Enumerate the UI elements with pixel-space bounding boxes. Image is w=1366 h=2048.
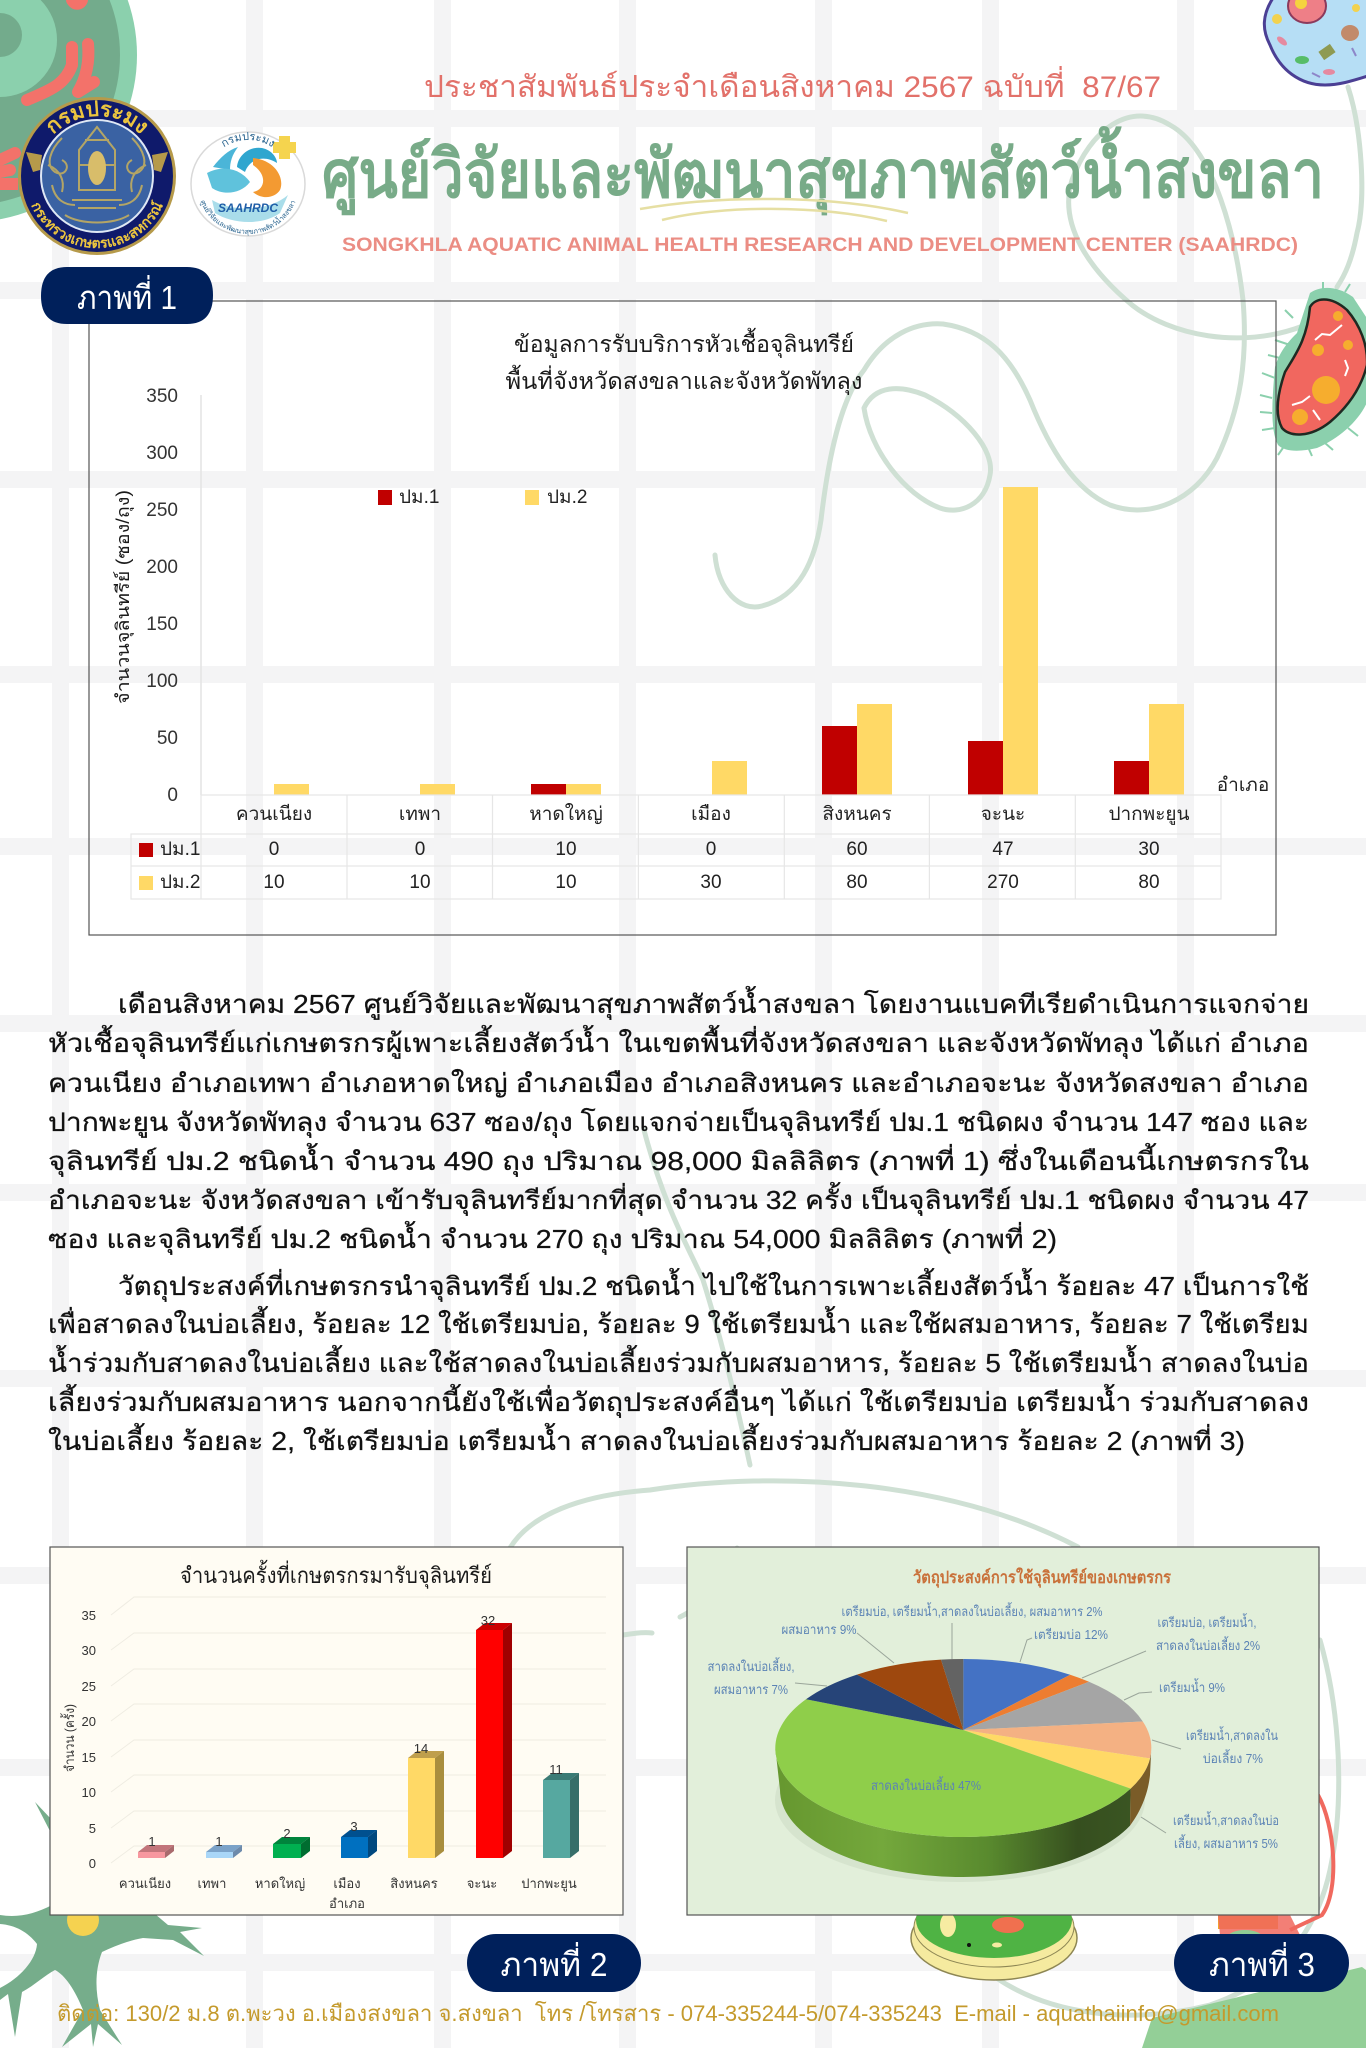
chart 3 labels: บ่อเลี้ยง 7% [1203,1749,1263,1766]
chart 1 y axis: 350 [146,386,178,407]
footer: contact line: ติดต่อ: 130/2 ม.8 ต.พะวง อ.เมืองสงขลา จ.สงขลา โทร /โทรสาร - 074-335244-5/074-335243 E-mail - aquathaiinfo@gmail.com [57,2001,1279,2026]
decoration: bottom-right green leaf [1142,1967,1366,2048]
chart 2 x labels: ควนเนียง [119,1876,171,1891]
chart 3 labels: เลี้ยง, ผสมอาหาร 5% [1174,1834,1278,1851]
chart 3 leader lines [795,1623,1181,1833]
chart 1 y axis: 200 [146,557,178,578]
chart 1 legend: ปม.2 [547,487,587,508]
chart 1 data table: เทพา [399,804,441,825]
chart 2 y axis: 25 [82,1679,96,1694]
chart 2 title: จำนวนครั้งที่เกษตรกรมารับจุลินทรีย์ [180,1560,492,1589]
chart 2 x labels: ปากพะยูน [521,1876,577,1892]
chart 2 bar: จะนะ [476,1613,512,1858]
chart 3 labels: สาดลงในบ่อเลี้ยง 47% [871,1776,981,1793]
chart 1 data table: 47 [992,839,1014,860]
chart 2 bar: เมือง [341,1819,377,1858]
text block: paragraph 1: ปากพะยูน จังหวัดพัทลุง จำนวน 637 ซอง/ถุง โดยแจกจ่ายเป็นจุลินทรีย์ ปม.1 ชนิดผง จำนวน 147 ซอง และ [48,1107,1309,1138]
chart 3 labels: เตรียมบ่อ 12% [1034,1627,1108,1642]
chart 2 x labels: เมือง [333,1876,361,1891]
chart 2 x labels: หาดใหญ่ [255,1876,305,1891]
chart 2 y axis: 35 [82,1608,96,1623]
text block: paragraph 1: จุลินทรีย์ ปม.2 ชนิดน้ำ จำนวน 490 ถุง ปริมาณ 98,000 มิลลิลิตร (ภาพที่ 1) ซึ่งในเดือนนี้เกษตรกรใน [48,1143,1309,1177]
chart 1 title: ข้อมูลการรับบริการหัวเชื้อจุลินทรีย์ [514,328,854,358]
chart 1 x axis title: อำเภอ [1217,775,1269,796]
chart 1 data table: 80 [1138,872,1160,893]
chart 1 data table: 30 [1138,839,1160,860]
text block: paragraph 1: หัวเชื้อจุลินทรีย์แก่เกษตรกรผู้เพาะเลี้ยงสัตว์น้ำ ในเขตพื้นที่จังหวัดสงขลา และจังหวัดพัทลุง ได้แก่ อำเภอ [48,1025,1309,1059]
decoration: top-right blue cell [1264,0,1366,85]
chart 3 labels [708,1602,1279,1851]
decoration: bottom-centre green cell [911,1882,1077,1980]
chart 2 y axis: 5 [89,1821,96,1836]
chart 1 data table: หาดใหญ่ [529,803,603,825]
chart 2 y axis: 10 [82,1785,96,1800]
chart 1 data table: 0 [415,839,425,860]
chart 1 data table: 30 [700,872,722,893]
logo: SAAHRDC: ศูนย์วิจัยและพัฒนาสุขภาพสัตว์น้ำสงขลา [200,200,296,236]
chart 3 labels: เตรียมน้ำ 9% [1159,1678,1225,1695]
chart 2 x labels: สิงหนคร [390,1876,438,1891]
text block: paragraph 1: ซอง และจุลินทรีย์ ปม.2 ชนิดน้ำ จำนวน 270 ถุง ปริมาณ 54,000 มิลลิลิตร (ภาพที่ 2) [48,1221,1057,1255]
chart 2 bar: สิงหนคร [408,1741,444,1858]
text block: paragraph 1 [48,986,1309,1255]
chart 1 data table: 270 [987,872,1019,893]
chart 2 y axis: จำนวน (ครั้ง) [60,1704,77,1772]
logo: Department of Fisheries seal [18,97,176,255]
chart 2 y axis: 20 [82,1714,96,1729]
chart 1 data table: ควนเนียง [236,803,312,825]
chart 2 bar: จะนะ: 32 [481,1613,495,1628]
panel: chart 3 purposes pie [687,1547,1319,1915]
badge: figure 1: ภาพที่ 1 [77,275,177,316]
chart 2 bar: หาดใหญ่ [273,1826,310,1858]
badge: figure 2: ภาพที่ 2 [500,1942,608,1983]
logo: SAAHRDC: SAAHRDC [218,201,278,215]
chart 2 bar: ปากพะยูน [543,1762,579,1858]
chart 2 y axis: 30 [82,1643,96,1658]
chart 2 bar: ปากพะยูน: 11 [549,1762,563,1777]
logo: Department of Fisheries seal: กระทรวงเกษตรและสหกรณ์ [31,199,163,248]
text block: paragraph 2 [48,1268,1309,1456]
chart 1 data table: 10 [555,839,577,860]
text block: paragraph 1: ควนเนียง อำเภอเทพา อำเภอหาดใหญ่ อำเภอเมือง อำเภอสิงหนคร และอำเภอจะนะ จังหวัดสงขลา อำเภอ [48,1069,1309,1098]
logo: Department of Fisheries seal: กรมประมง [48,100,148,134]
chart 1 data table: จะนะ [981,804,1025,825]
chart 1 y axis: 100 [146,671,178,692]
decorative title underline [640,199,908,221]
text block: paragraph 2: วัตถุประสงค์ที่เกษตรกรนำจุลินทรีย์ ปม.2 ชนิดน้ำ ไปใช้ในการเพาะเลี้ยงสัตว์น้ำ ร้อยละ 47 เป็นการใช้ [118,1268,1309,1302]
chart 1 y axis: จำนวนจุลินทรีย์ (ซอง/ถุง) [113,490,134,704]
panel: chart 2 visits by district [50,1547,623,1915]
chart 2 x labels: อำเภอ [329,1896,365,1911]
chart 1 data table: 10 [409,872,431,893]
chart 2 bar: เทพา: 1 [215,1834,223,1849]
decoration: top-left green cell [0,0,137,222]
chart 3 labels: สาดลงในบ่อเลี้ยง 2% [1156,1636,1260,1653]
heading: bulletin line: ประชาสัมพันธ์ประจำเดือนสิงหาคม 2567 ฉบับที่ 87/67 [424,66,1161,104]
badge: figure 3 [1174,1934,1349,1992]
chart 1 data table [131,795,1221,899]
chart 1 title [506,328,862,395]
chart 1 legend [378,487,587,508]
logo: SAAHRDC: กรมประมง [222,132,274,147]
chart 2 bar: หาดใหญ่: 2 [283,1826,291,1841]
chart 2 bar: เทพา [206,1834,242,1858]
chart 2 y axis: 15 [82,1750,96,1765]
decoration: bottom-left green neuron [0,1802,204,2047]
text block: paragraph 2: ในบ่อเลี้ยง ร้อยละ 2, ใช้เตรียมบ่อ เตรียมน้ำ สาดลงในบ่อเลี้ยงร่วมกับผสมอาหาร ร้อยละ 2 (ภาพที่ 3) [48,1423,1245,1456]
chart 2 x labels: เทพา [198,1876,226,1891]
chart 3 labels: สาดลงในบ่อเลี้ยง, [708,1657,794,1674]
chart 1 y axis: 50 [157,728,178,749]
chart 1 y axis: 150 [146,614,178,635]
chart 1 data table: 0 [269,839,279,860]
badge: figure 2 [467,1934,641,1992]
chart 3 labels: เตรียมน้ำ,สาดลงใน [1186,1726,1278,1743]
chart 2 bar: เมือง: 3 [350,1819,358,1834]
text block: paragraph 2: น้ำร่วมกับสาดลงในบ่อเลี้ยง และใช้สาดลงในบ่อเลี้ยงร่วมกับผสมอาหาร, ร้อยละ 5 ใช้เตรียมน้ำ สาดลงในบ่อ [48,1345,1309,1378]
text block: paragraph 1: อำเภอจะนะ จังหวัดสงขลา เข้ารับจุลินทรีย์มากที่สุด จำนวน 32 ครั้ง เป็นจุลินทรีย์ ปม.1 ชนิดผง จำนวน 47 [48,1182,1309,1216]
chart 1 data table: 0 [706,839,716,860]
chart 1 data table: 10 [555,872,577,893]
logo: SAAHRDC [190,131,306,237]
chart 2 gridlines [111,1597,606,1863]
decoration: bottom-right coral organism [1218,1795,1333,1946]
chart 3 3D pie [775,1659,1151,1882]
chart 3 labels: ผสมอาหาร 7% [714,1682,788,1697]
chart 3 labels: เตรียมบ่อ, เตรียมน้ำ, [1158,1613,1256,1630]
chart 1 y axis: 250 [146,500,178,521]
chart 1 data table: เมือง [691,804,731,825]
chart 3 labels: ผสมอาหาร 9% [782,1622,857,1637]
chart 2 bar: ควนเนียง: 1 [148,1834,156,1849]
text block: paragraph 1: เดือนสิงหาคม 2567 ศูนย์วิจัยและพัฒนาสุขภาพสัตว์น้ำสงขลา โดยงานแบคทีเรียดำเนินการแจกจ่าย [118,986,1309,1020]
chart 1 data table: สิงหนคร [822,804,892,825]
chart 1 title: พื้นที่จังหวัดสงขลาและจังหวัดพัทลุง [506,365,862,395]
badge: figure 1 [41,267,213,324]
chart 1 legend: ปม.1 [399,487,439,508]
chart 2 y axis [60,1608,96,1871]
chart 1 y axis: 0 [167,785,178,806]
decorative swirling lines [510,87,1362,2015]
chart 1 data table: 10 [263,872,285,893]
chart 2 bar: สิงหนคร: 14 [414,1741,428,1756]
chart 1 y axis: 300 [146,443,178,464]
chart 1 data table: 60 [846,839,868,860]
chart 3 labels: เตรียมน้ำ,สาดลงในบ่อ [1173,1811,1279,1828]
panel: chart 1 district supply [89,301,1276,935]
subtitle: centre name in English: SONGKHLA AQUATIC ANIMAL HEALTH RESEARCH AND DEVELOPMENT CENTER (SAAHRDC) [342,235,1298,256]
chart 1 bars [274,487,1184,795]
chart 1 y axis [113,386,201,806]
chart 1 data table: ปากพะยูน [1108,804,1190,825]
chart 2 x labels [119,1876,577,1911]
decoration: right bacterium [1260,282,1366,456]
badge: figure 3: ภาพที่ 3 [1209,1942,1315,1983]
chart 2 y axis: 0 [89,1856,96,1871]
chart 1 data table: 80 [846,872,868,893]
chart 1 data table: ปม.1 [160,839,200,860]
chart 2 bar: ควนเนียง [138,1834,174,1858]
chart 3 labels: เตรียมบ่อ, เตรียมน้ำ,สาดลงในบ่อเลี้ยง, ผสมอาหาร 2% [842,1602,1103,1619]
text block: paragraph 2: เพื่อสาดลงในบ่อเลี้ยง, ร้อยละ 12 ใช้เตรียมบ่อ, ร้อยละ 9 ใช้เตรียมน้ำ และใช้ผสมอาหาร, ร้อยละ 7 ใช้เตรียม [48,1306,1309,1339]
chart 1 data table: ปม.2 [160,872,200,893]
chart 3 title: วัตถุประสงค์การใช้จุลินทรีย์ของเกษตรกร [913,1567,1172,1588]
text block: paragraph 2: เลี้ยงร่วมกับผสมอาหาร นอกจากนี้ยังใช้เพื่อวัตถุประสงค์อื่นๆ ได้แก่ ใช้เตรียมบ่อ เตรียมน้ำ ร่วมกับสาดลง [48,1384,1309,1418]
chart 2 x labels: จะนะ [467,1876,497,1891]
